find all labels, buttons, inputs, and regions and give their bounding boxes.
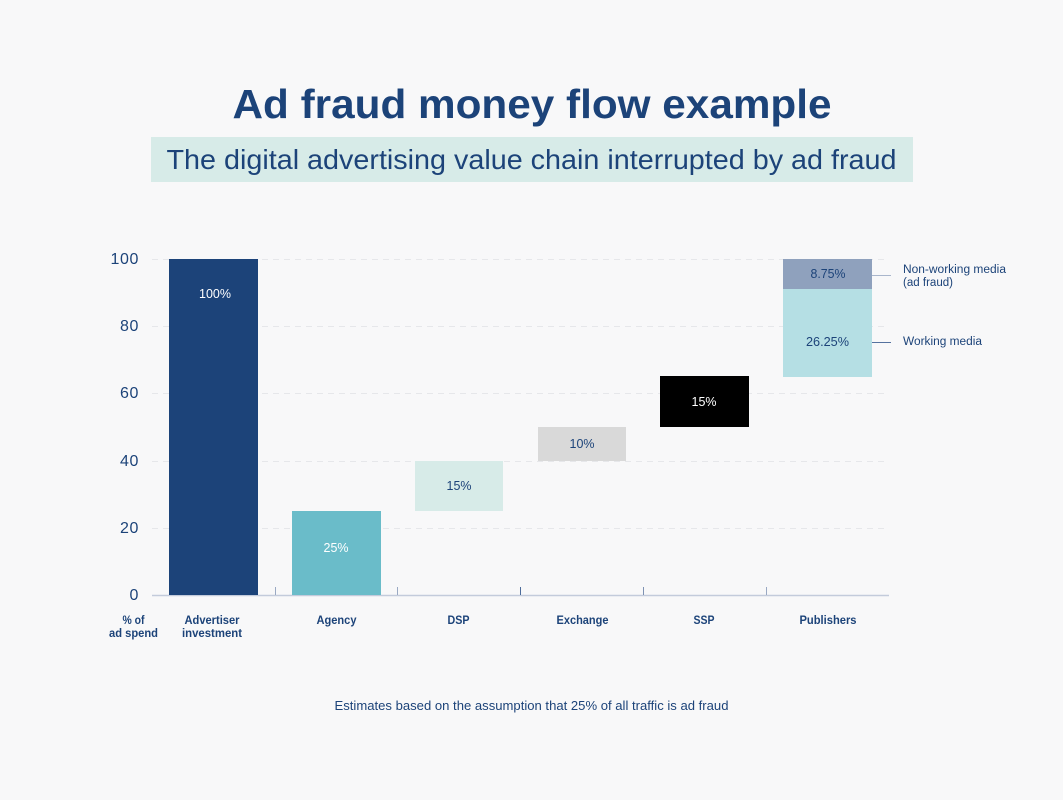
y axis labels: 60: [120, 385, 139, 402]
title: Ad fraud money flow example: [232, 81, 832, 127]
bar: SSP 15%: [660, 376, 749, 427]
x axis labels: SSP: [694, 615, 715, 627]
callout: working media: Working media: [903, 336, 983, 348]
bar: DSP 15%: [415, 461, 503, 511]
x axis labels: Advertiser: [184, 615, 240, 627]
x axis labels: [109, 615, 856, 640]
y axis labels: [110, 251, 139, 604]
y axis labels: 100: [110, 251, 139, 268]
bar: publishers stacked: [783, 259, 872, 377]
x axis labels: Exchange: [556, 615, 608, 627]
subtitle banner: [151, 137, 913, 182]
bar: agency 25%: [292, 511, 381, 595]
x axis labels: investment: [182, 628, 242, 640]
bar: advertiser investment 100%: 100%: [199, 287, 231, 301]
bar: DSP 15%: 15%: [446, 479, 472, 493]
footnote: Estimates based on the assumption that 25% of all traffic is ad fraud: [334, 699, 729, 713]
bar: agency 25%: 25%: [324, 541, 348, 555]
y axis labels: 40: [120, 453, 139, 470]
y axis labels: 0: [130, 587, 139, 604]
y axis labels: 20: [120, 520, 139, 537]
callout: non-working media: [872, 264, 1007, 289]
bar: publishers stacked: 8.75%: [810, 266, 846, 281]
bar: publishers stacked: 26.25%: [806, 334, 849, 349]
x axis labels: DSP: [448, 615, 470, 627]
callout: non-working media: Non-working media: [903, 264, 1007, 276]
callout: non-working media: (ad fraud): [903, 277, 953, 289]
callout: working media: [872, 336, 983, 348]
x axis labels: Publishers: [800, 615, 856, 627]
subtitle banner: The digital advertising value chain interrupted by ad fraud: [166, 144, 896, 175]
bar: exchange 10%: 10%: [570, 437, 594, 451]
x axis labels: Agency: [316, 615, 357, 627]
x axis: [152, 587, 889, 596]
bar: advertiser investment 100%: [169, 259, 258, 595]
y axis labels: 80: [120, 318, 139, 335]
waterfall chart: [109, 251, 1007, 640]
bar: exchange 10%: [538, 427, 626, 461]
x axis labels: ad spend: [109, 628, 158, 640]
x axis labels: % of: [122, 615, 145, 627]
bar: SSP 15%: 15%: [692, 395, 716, 409]
